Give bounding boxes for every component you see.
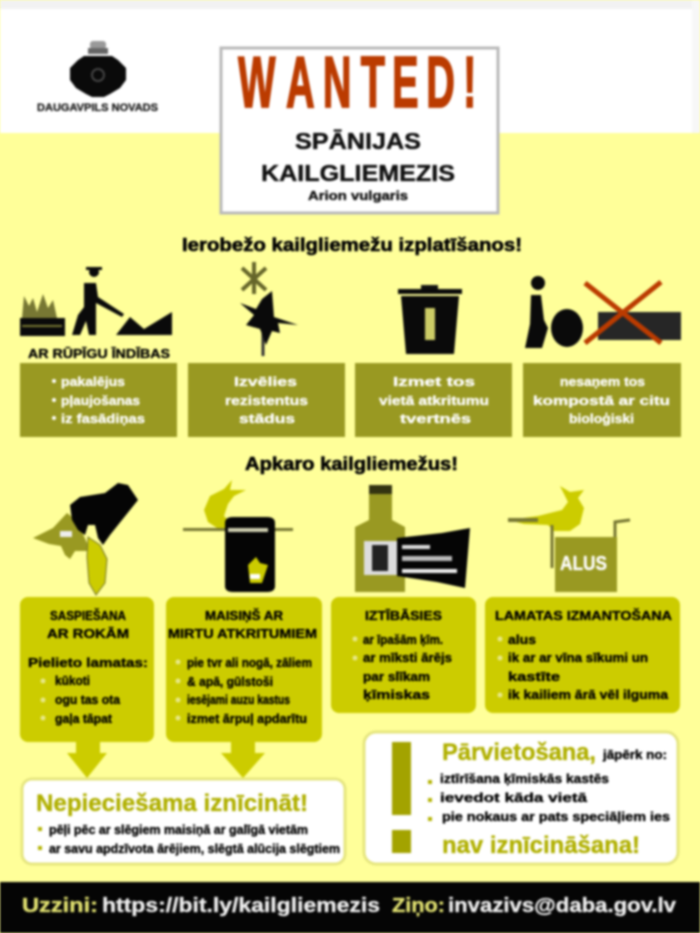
control panel 4: LAMATAS IZMANTOŠANA [495,608,673,623]
control panel 2: pie tvr ali nogā, zāliem [187,655,312,670]
control panel 1: AR ROKĀM [47,626,129,641]
control panel 3: par slīkam [363,669,430,684]
white box: relocation: jāpērk no: [602,747,667,762]
prevention box 4: bioloģiski [569,411,634,426]
wanted title: WANTED! [238,43,476,123]
white box: relocation: pie nokaus ar pats speciāļiem ies [442,809,670,824]
control panel 1: kūkoti [55,673,90,688]
control panel 2 [166,597,322,742]
prevention box 1: pļaujošanas [61,393,140,408]
white box: must destroy: pēļi pēc ar slēgiem maisiņā ar galīgā vietām [49,822,308,837]
latin name: Arion vulgaris [308,188,408,203]
icon: gardener with mower and crate [20,267,172,336]
footer links: Ziņo: [392,895,445,917]
control panel 4: ik ar ar vīna sīkumi un [508,650,648,665]
caption above box 1: AR RŪPĪGU ĪNDĪBAS [28,346,170,361]
prevention box 3: Izmet tos [393,374,475,389]
prevention box 3: tvertnēs [400,411,471,426]
prevention box 1: iz fasādiņas [61,411,145,426]
species name line 2: KAILGLIEMEZIS [261,160,455,186]
control panel 2: MIRTU ATKRITUMIEM [168,626,317,641]
icon: person with compost crossed out [525,276,681,348]
white box: relocation [364,732,678,864]
prevention box 3: vietā atkritumu [379,393,489,408]
control panel 1: Pielieto lamatas: [28,655,148,670]
footer links [22,895,677,917]
control panel 4: kastīte [508,669,560,684]
prevention box 1: pakalējus [61,374,125,389]
heading: prevention: Ierobežo kailgliemežu izplatīšanos! [182,235,522,255]
white box: relocation: ievedot kāda vietā [440,790,588,805]
connecting arrow 2 [221,740,265,778]
icon: foot crushing slug [33,483,138,595]
prevention box 1 [20,363,177,437]
prevention box 3 [355,363,512,437]
box label: ALUS [560,553,607,575]
connecting arrow 1 [67,740,107,778]
control panel 3 [331,597,476,713]
red cross [585,282,661,343]
icon: slug in beer box [508,486,630,592]
control panel 4: alus [508,632,536,647]
logo caption: DAUGAVPILS NOVADS [37,102,158,114]
white box: must destroy [22,779,345,864]
exclamation mark [392,742,411,853]
logo: coat of arms [37,41,158,114]
prevention box 2: stādus [239,411,295,426]
control panel 1: ogu tas ota [55,692,121,707]
control panel 3: IZTĪBĀSIES [365,608,442,623]
footer links: https://bit.ly/kailgliemezis [102,895,380,917]
prevention box 2 [188,363,345,437]
icon: plant [240,262,298,356]
species name line 1: SPĀNIJAS [295,128,421,154]
control panel 2: & apā, gūlstoši [187,674,273,689]
control panel 4 [485,597,680,713]
control panel 2: MAISIŅŠ AR [205,608,284,623]
icon: trash bin [398,285,462,354]
icon: bottle with label [355,485,470,592]
prevention box 4: nesaņem tos [560,374,645,389]
footer links: invazivs@daba.gov.lv [448,895,677,917]
footer bar [0,882,700,933]
control panel 3: ar mīksti ārējs [363,650,452,665]
not destruction: nav iznīcināšana! [442,832,640,859]
prevention box 2: rezistentus [225,393,308,408]
control panel 2: izmet ārpuļ apdarītu [187,711,307,726]
prevention box 4: kompostā ar citu [533,393,670,408]
control panel 1 [20,597,154,742]
control panel 1: SASPIEŠANA [50,608,127,623]
heading: control: Apkaro kailgliemežus! [245,454,458,474]
icon: slug in bin [183,480,293,592]
wanted box [221,43,498,213]
white box: relocation: iztīrīšana ķīmiskās kastēs [440,771,609,786]
white box: must destroy: ar savu apdzīvota ārējiem, slēgtā alūcija slēgtiem [49,841,340,856]
control panel 1: gaļa tāpat [55,711,113,726]
control panel 3: ar īpašām ķīm. [363,632,443,647]
prevention box 4 [523,363,681,437]
prevention box 2: Izvēlies [234,374,297,389]
control panel 3: ķīmiskas [363,687,430,702]
must destroy title: Nepieciešama iznīcināt! [36,790,308,817]
footer links: Uzzini: [22,895,98,917]
control panel 2: iesējami auzu kastus [187,692,290,707]
relocation title: Pārvietošana, [442,739,596,766]
control panel 4: ik kailiem ārā vēl ilguma [508,687,669,702]
